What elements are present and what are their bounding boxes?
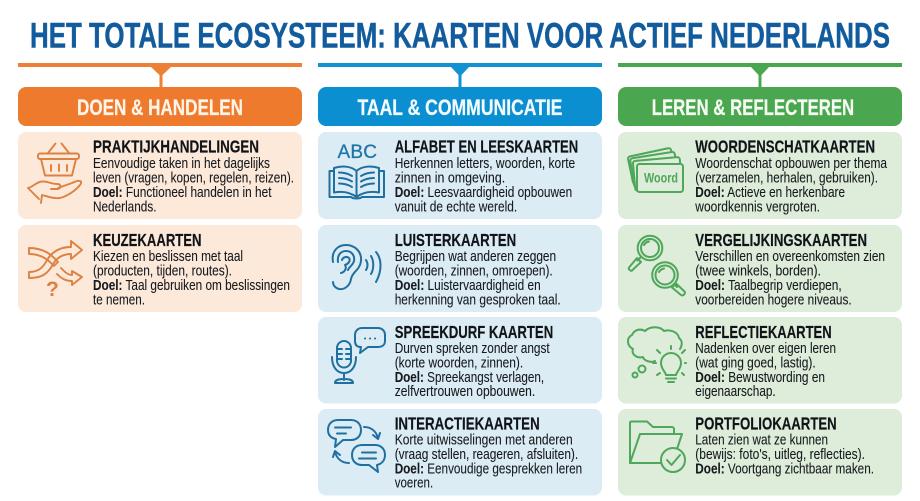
- text: interactiekaarten: INTERACTIEKAARTEN: [395, 414, 540, 434]
- text: keuzekaarten: Kiezen en beslissen met taal: [93, 249, 243, 265]
- header: taal en communicatie: [318, 87, 602, 126]
- text: portfoliokaarten: PORTFOLIOKAARTEN: [695, 414, 837, 434]
- icon: crossing arrows with question mark: [29, 241, 82, 301]
- card: alfabet en leeskaarten: [318, 132, 602, 219]
- text: vergelijkingskaarten: VERGELIJKINGSKAARTEN: [695, 230, 867, 250]
- text: alfabet en leeskaarten: vanuit de echte wereld.: [395, 200, 517, 216]
- text: luisterkaarten: [395, 230, 561, 308]
- header: leren en reflecteren: [618, 87, 902, 126]
- icon: exchanging speech bubbles: [328, 420, 385, 472]
- icon: basket on hand: [28, 144, 81, 203]
- text: interactiekaarten: Korte uitwisselingen met anderen: [395, 432, 573, 448]
- text: portfoliokaarten: [695, 414, 874, 477]
- text: portfoliokaarten: (bewijs: foto's, uitleg, reflecties).: [695, 447, 865, 463]
- icon: word cards: [628, 148, 683, 192]
- panel: taal en communicatie: [318, 63, 602, 496]
- connector: orange: [18, 63, 302, 87]
- icon: abc book: [330, 142, 384, 198]
- icon: two magnifying glasses: [629, 236, 685, 295]
- text: vergelijkingskaarten: Doel: Taalbegrip verdiepen,: [695, 278, 842, 294]
- header: leren en reflecteren: LEREN & REFLECTEREN: [652, 95, 854, 120]
- icon: abc book: ABC: [338, 142, 377, 163]
- text: spreekdurf kaarten: SPREEKDURF KAARTEN: [395, 322, 553, 342]
- card: interactiekaarten: [318, 409, 602, 496]
- connector: green: [618, 63, 902, 87]
- header: doen en handelen: DOEN & HANDELEN: [77, 95, 243, 120]
- text: spreekdurf kaarten: (korte woorden, zinnen).: [395, 356, 523, 372]
- text: reflectiekaarten: Nadenken over eigen leren: [695, 341, 836, 357]
- text: reflectiekaarten: (wat ging goed, lastig).: [695, 356, 816, 372]
- text: luisterkaarten: Doel: Luistervaardigheid en: [395, 278, 541, 294]
- text: interactiekaarten: [395, 414, 582, 492]
- text: praktijkhandelingen: Nederlands.: [93, 200, 156, 216]
- icon: word cards: Woord: [644, 170, 678, 186]
- text: alfabet en leeskaarten: ALFABET EN LEESKAARTEN: [395, 137, 578, 157]
- card: woordenschatkaarten: [618, 132, 902, 219]
- text: luisterkaarten: (woorden, zinnen, omroepen).: [395, 264, 553, 280]
- icon: crossing arrows with question mark: ?: [46, 278, 59, 301]
- text: reflectiekaarten: REFLECTIEKAARTEN: [695, 322, 832, 342]
- card: luisterkaarten: [318, 225, 602, 312]
- text: interactiekaarten: Doel: Eenvoudige gesprekken leren: [395, 461, 582, 477]
- text: keuzekaarten: KEUZEKAARTEN: [93, 230, 202, 250]
- text: spreekdurf kaarten: zelfvertrouwen opbouwen.: [395, 384, 535, 400]
- text: praktijkhandelingen: Eenvoudige taken in het dagelijks: [93, 156, 270, 172]
- text: vergelijkingskaarten: voorbereiden hogere niveaus.: [695, 292, 852, 308]
- text: vergelijkingskaarten: (twee winkels, borden).: [695, 264, 821, 280]
- icon: microphone and speech bubble: [332, 328, 385, 383]
- card: portfoliokaarten: [618, 409, 902, 496]
- text: reflectiekaarten: [695, 322, 836, 400]
- text: spreekdurf kaarten: Doel: Spreekangst verlagen,: [395, 370, 544, 386]
- icon: folder with check mark: [630, 422, 685, 472]
- text: woordenschatkaarten: woordkennis vergroten.: [694, 200, 820, 216]
- text: portfoliokaarten: Doel: Voortgang zichtbaar maken.: [695, 461, 874, 477]
- panel: leren en reflecteren: [618, 63, 902, 496]
- header: doen en handelen: [18, 87, 302, 126]
- text: woordenschatkaarten: (verzamelen, herhalen, gebruiken).: [695, 170, 878, 186]
- text: interactiekaarten: voeren.: [395, 476, 433, 492]
- text: praktijkhandelingen: PRAKTIJKHANDELINGEN: [93, 137, 259, 157]
- card: keuzekaarten: [18, 225, 302, 312]
- icon: thought cloud and light bulb: [628, 327, 686, 382]
- text: praktijkhandelingen: leven (vragen, kopen, regelen, reizen).: [93, 170, 294, 186]
- text: spreekdurf kaarten: [395, 322, 553, 400]
- text: vergelijkingskaarten: [695, 230, 885, 308]
- text: spreekdurf kaarten: Durven spreken zonder angst: [395, 341, 550, 357]
- text: portfoliokaarten: Laten zien wat ze kunnen: [695, 432, 828, 448]
- card: vergelijkingskaarten: [618, 225, 902, 312]
- text: keuzekaarten: Doel: Taal gebruiken om beslissingen: [93, 278, 290, 294]
- text: luisterkaarten: herkenning van gesproken taal.: [395, 292, 561, 308]
- text: praktijkhandelingen: [93, 137, 294, 216]
- text: luisterkaarten: LUISTERKAARTEN: [395, 230, 516, 250]
- text: keuzekaarten: (producten, tijden, routes).: [93, 264, 232, 280]
- text: alfabet en leeskaarten: [395, 137, 578, 216]
- text: keuzekaarten: te nemen.: [93, 292, 145, 308]
- text: woordenschatkaarten: [694, 137, 888, 216]
- text: reflectiekaarten: eigenaarschap.: [695, 384, 776, 400]
- text: alfabet en leeskaarten: Herkennen letters, woorden, korte: [395, 156, 575, 172]
- card: praktijkhandelingen: [18, 132, 302, 219]
- header: taal en communicatie: TAAL & COMMUNICATIE: [358, 95, 562, 120]
- connector: blue: [318, 63, 602, 87]
- text: woordenschatkaarten: Doel: Actieve en herkenbare: [695, 185, 845, 201]
- icon: ear with sound waves: [333, 245, 380, 289]
- card: reflectiekaarten: [618, 317, 902, 404]
- text: luisterkaarten: Begrijpen wat anderen zeggen: [395, 249, 556, 265]
- text: alfabet en leeskaarten: zinnen in omgeving.: [395, 170, 505, 186]
- text: interactiekaarten: (vraag stellen, reageren, afsluiten).: [395, 447, 578, 463]
- text: reflectiekaarten: Doel: Bewustwording en: [695, 370, 825, 386]
- text: keuzekaarten: [93, 230, 290, 308]
- card: spreekdurf kaarten: [318, 317, 602, 404]
- panel: doen en handelen: [18, 63, 302, 312]
- text: praktijkhandelingen: Doel: Functioneel handelen in het: [93, 185, 272, 201]
- text: alfabet en leeskaarten: Doel: Leesvaardigheid opbouwen: [395, 185, 572, 201]
